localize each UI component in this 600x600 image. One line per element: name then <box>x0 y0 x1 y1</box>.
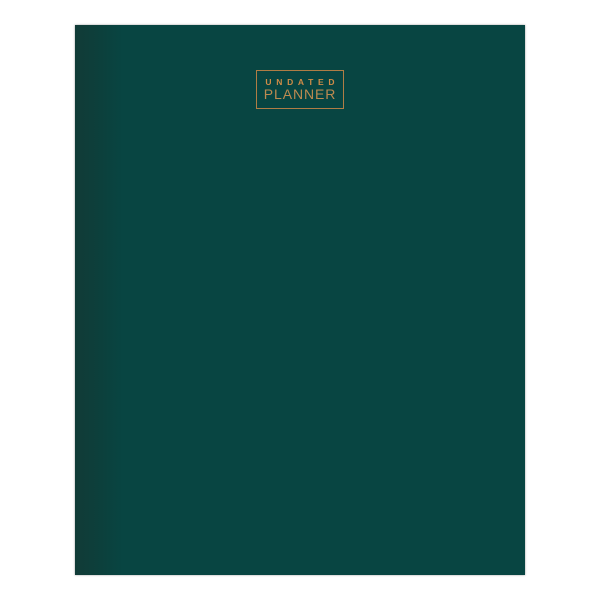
title badge <box>256 70 344 109</box>
panel: planner cover <box>75 25 525 575</box>
heading: undated: UNDATED <box>265 77 339 87</box>
heading: planner: PLANNER <box>264 86 336 102</box>
spine shading <box>75 25 123 575</box>
